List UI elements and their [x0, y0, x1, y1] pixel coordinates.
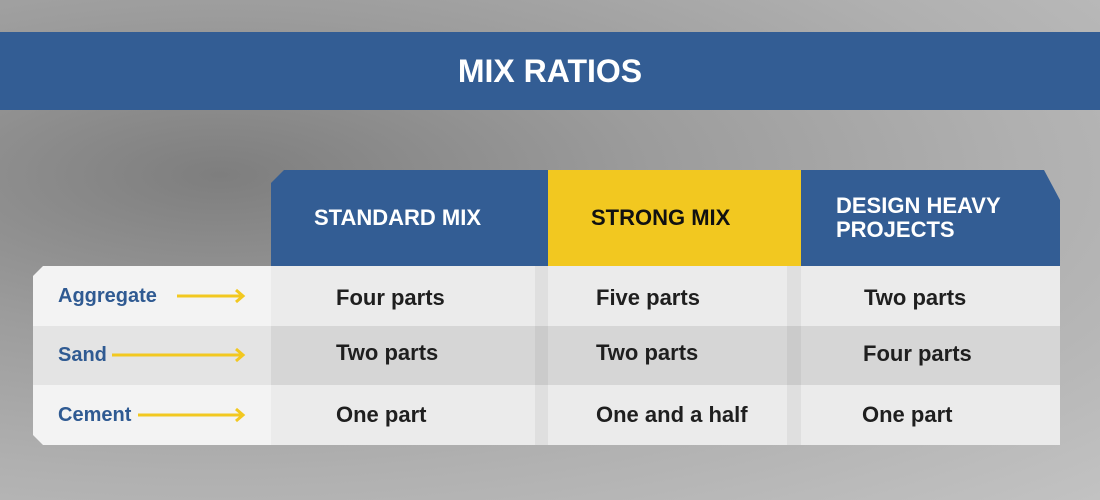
- text: One and a half: [596, 402, 748, 427]
- header: design heavy projects: DESIGN HEAVY: [836, 193, 1001, 218]
- header: strong mix: [548, 170, 801, 266]
- text: Cement: [58, 404, 131, 426]
- text: Two parts: [596, 340, 698, 365]
- values: Four parts: [336, 285, 445, 310]
- text: Two parts: [864, 285, 966, 310]
- text: Sand: [58, 344, 107, 366]
- text: One part: [862, 402, 952, 427]
- text: Two parts: [336, 340, 438, 365]
- title banner: [0, 32, 1100, 110]
- header: standard mix: [271, 170, 548, 266]
- header: design heavy projects: [801, 170, 1060, 266]
- header: standard mix: STANDARD MIX: [314, 205, 481, 230]
- header: design heavy projects: PROJECTS: [836, 217, 955, 242]
- row labels: Aggregate: [58, 284, 157, 306]
- header: strong mix: STRONG MIX: [591, 205, 730, 230]
- title banner: MIX RATIOS: [458, 52, 642, 88]
- text: Four parts: [863, 341, 972, 366]
- table body: [33, 266, 1060, 445]
- text: Five parts: [596, 285, 700, 310]
- text: One part: [336, 402, 426, 427]
